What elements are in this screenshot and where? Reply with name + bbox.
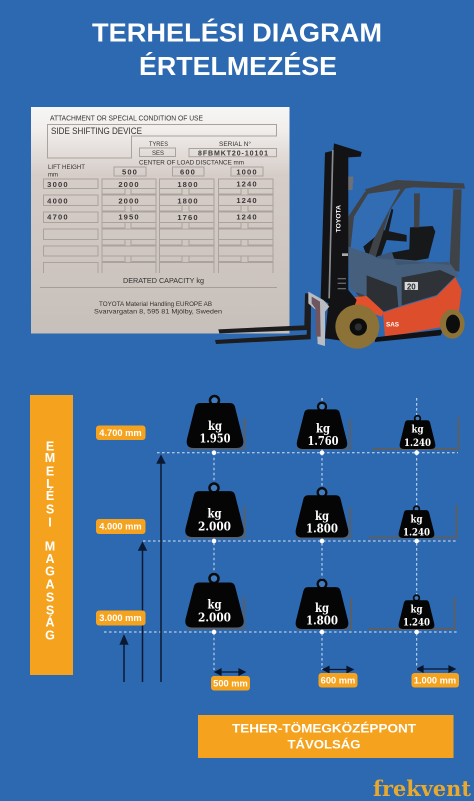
weight 2000 kg middle: kg xyxy=(208,507,222,521)
cab frame xyxy=(347,180,465,300)
weight 2000 kg bottom: kg xyxy=(208,598,222,612)
weight 1760 kg: kg xyxy=(316,421,330,435)
capacity table: 3000 xyxy=(47,180,69,189)
weight 1800 kg bottom xyxy=(296,580,348,629)
weight 2000 kg middle xyxy=(185,484,244,537)
load centre columns: 1000 xyxy=(236,168,258,176)
fork carriage xyxy=(308,292,329,346)
weight 1800 kg middle: 1.800 xyxy=(306,522,338,536)
label: 4700 mm: 4.700 mm xyxy=(99,428,142,438)
axis label xyxy=(45,440,55,642)
logo: frekvent: frekvent xyxy=(373,776,471,801)
capacity badge: 20 xyxy=(407,282,416,291)
body panels xyxy=(348,247,459,312)
capacity table: 4700 xyxy=(47,212,69,222)
capacity table xyxy=(44,179,273,273)
weight 1240 kg top: 1.240 xyxy=(404,437,431,449)
weight 2000 kg bottom: 2.000 xyxy=(198,611,231,625)
tyres field: SES xyxy=(152,150,164,157)
axis label: A xyxy=(45,552,55,566)
manufacturer address xyxy=(94,301,223,316)
label: 1000 mm xyxy=(412,673,459,688)
plate header text: ATTACHMENT OR SPECIAL CONDITION OF USE xyxy=(50,116,203,122)
axis label: E xyxy=(46,440,54,454)
label: 500 mm xyxy=(211,676,250,690)
label: 4000 mm xyxy=(96,519,146,534)
weight 1240 kg top: kg xyxy=(412,424,424,436)
label: 1000 mm: 1.000 mm xyxy=(414,676,456,686)
arrow: 4700 mm height xyxy=(158,456,164,682)
label: 4700 mm xyxy=(96,426,146,440)
seat base xyxy=(377,252,450,265)
panel: load centre distance xyxy=(198,715,454,758)
weight 1950 kg: kg xyxy=(208,419,222,433)
label: 3000 mm xyxy=(96,610,146,626)
axis label: S xyxy=(46,604,54,618)
counterweight xyxy=(383,277,462,337)
load centre heading: CENTER OF LOAD DISCTANCE mm xyxy=(139,160,244,166)
serial number field: 8FBMKT20-10101 xyxy=(198,150,268,158)
label: 3000 mm: 3.000 mm xyxy=(99,613,142,623)
axis label: S xyxy=(46,590,54,604)
serial number field xyxy=(189,141,276,158)
arrow: 1000 mm distance xyxy=(417,666,455,672)
weight 1240 kg bottom: 1.240 xyxy=(403,617,430,629)
capacity table: 1760 xyxy=(177,213,199,222)
label: 600 mm: 600 mm xyxy=(321,676,355,686)
axis label: É xyxy=(46,488,54,503)
weight 2000 kg bottom xyxy=(185,574,244,628)
capacity table: 1800 xyxy=(177,196,199,206)
lift height heading: LIFT HEIGHT xyxy=(48,164,85,171)
title: ÉRTELMEZÉSE xyxy=(139,52,337,81)
serial number field: SERIAL N° xyxy=(219,141,252,148)
weight 1800 kg bottom: 1.800 xyxy=(306,614,338,628)
capacity table: 2000 xyxy=(118,180,140,189)
weight 1950 kg: 1.950 xyxy=(200,431,230,445)
axis label: M xyxy=(45,540,55,554)
front wheel xyxy=(335,305,379,349)
arrow: 3000 mm height xyxy=(120,636,128,682)
forks xyxy=(215,293,311,344)
weight 1240 kg middle xyxy=(399,506,434,539)
derated capacity caption: DERATED CAPACITY kg xyxy=(123,278,204,285)
axis label: I xyxy=(48,516,52,530)
title: TERHELÉSI DIAGRAM xyxy=(92,18,382,48)
label: 500 mm: 500 mm xyxy=(213,679,248,689)
weight 1800 kg bottom: kg xyxy=(315,601,329,615)
capacity table: 1240 xyxy=(236,180,258,188)
axis label: G xyxy=(45,628,55,642)
weight 1760 kg xyxy=(297,403,347,449)
seat and steering xyxy=(363,208,435,265)
attachment box: SIDE SHIFTING DEVICE xyxy=(51,126,142,136)
capacity table: 1950 xyxy=(118,212,140,222)
capacity badge xyxy=(405,282,418,291)
cab windshield xyxy=(349,181,410,255)
fork outlines xyxy=(186,417,458,629)
load centre columns xyxy=(114,167,263,176)
capacity table: 1240 xyxy=(236,212,258,222)
axis label: M xyxy=(45,451,55,465)
mast xyxy=(321,143,362,341)
weight 1240 kg bottom xyxy=(399,595,434,629)
arrow: 500 mm distance xyxy=(215,669,245,675)
axis label: E xyxy=(46,464,54,478)
rear wheel xyxy=(440,309,465,339)
weight 1240 kg bottom: kg xyxy=(410,604,423,616)
capacity table: 1800 xyxy=(177,180,199,189)
panel: load centre distance: TEHER-TÖMEGKÖZÉPPONT xyxy=(232,721,417,736)
load centre columns: 500 xyxy=(122,168,138,176)
axis label: Á xyxy=(45,614,55,630)
mast logo: TOYOTA xyxy=(335,205,342,232)
title xyxy=(92,18,382,81)
manufacturer address: Svarvargatan 8, 595 81 Mjölby, Sweden xyxy=(94,308,223,316)
label: 4000 mm: 4.000 mm xyxy=(99,522,142,532)
intersection dots xyxy=(212,450,419,634)
arrow: 600 mm distance xyxy=(323,666,353,672)
arrow: 4000 mm height xyxy=(139,543,146,682)
weight 1760 kg: 1.760 xyxy=(308,434,338,448)
panel: capacity data plate xyxy=(31,107,290,334)
weight 1240 kg middle: kg xyxy=(410,513,423,525)
SAS badge: SAS xyxy=(386,322,399,329)
front fender xyxy=(341,296,384,317)
lift height heading xyxy=(48,164,85,178)
height reference lines xyxy=(104,398,458,670)
weight 1240 kg middle: 1.240 xyxy=(403,527,430,539)
axis label: A xyxy=(45,578,55,592)
capacity table: 4000 xyxy=(47,196,69,206)
weight 1950 kg xyxy=(187,396,243,448)
capacity table: 1240 xyxy=(236,196,258,205)
weight 1240 kg top xyxy=(400,416,435,449)
attachment box xyxy=(48,124,276,158)
lift height heading: mm xyxy=(48,172,58,178)
panel: lift height axis xyxy=(30,395,73,675)
capacity table: 2000 xyxy=(118,196,140,206)
weight 1800 kg middle: kg xyxy=(315,509,329,523)
axis label: L xyxy=(46,477,54,491)
tyres field xyxy=(140,141,176,157)
axis label: S xyxy=(46,502,54,516)
icon: forklift xyxy=(215,143,465,349)
load centre columns: 600 xyxy=(180,168,196,176)
axis label: G xyxy=(45,564,55,578)
tyres field: TYRES xyxy=(149,141,168,148)
weight 2000 kg middle: 2.000 xyxy=(198,520,231,534)
manufacturer address: TOYOTA Material Handling EUROPE AB xyxy=(99,301,212,308)
weight 1800 kg middle xyxy=(296,488,348,538)
panel: load centre distance: TÁVOLSÁG xyxy=(288,736,360,751)
label: 600 mm xyxy=(318,673,358,688)
chassis xyxy=(375,329,443,342)
